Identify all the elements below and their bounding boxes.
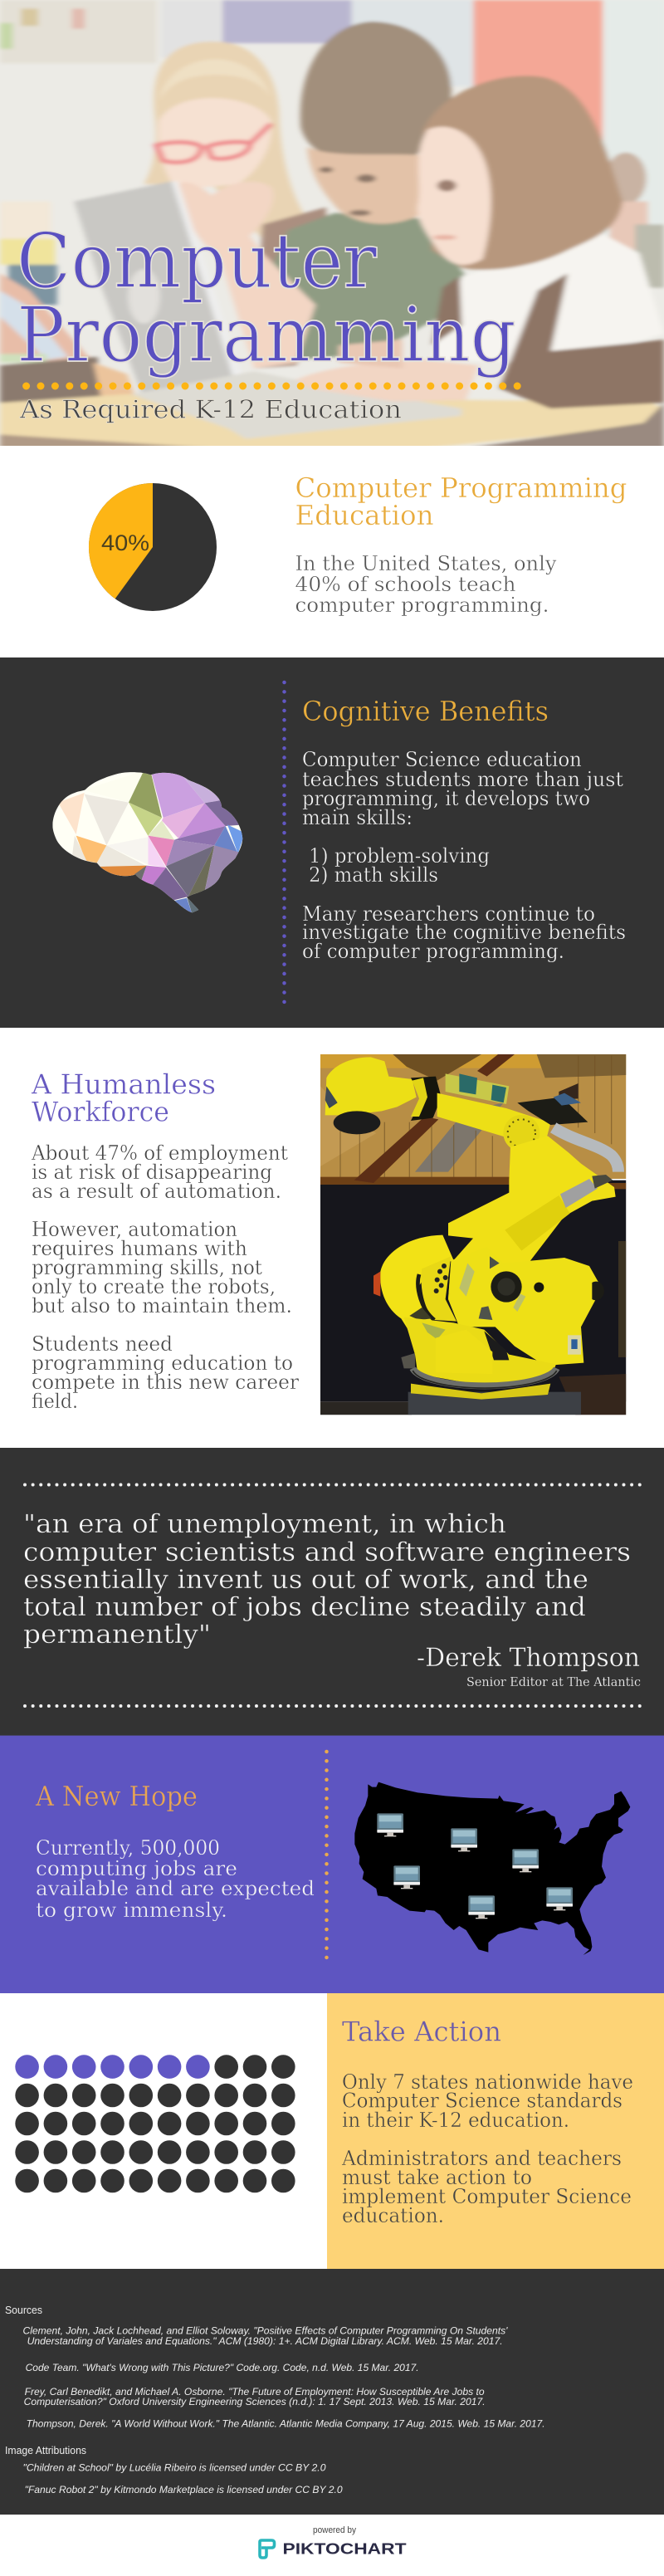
- laptop screen: [73, 181, 234, 393]
- body text: Administrators and teachers: [341, 2147, 622, 2170]
- heading: Workforce: [32, 1096, 169, 1127]
- hands on keyboard: [296, 359, 479, 402]
- lower body: [404, 1317, 556, 1386]
- right girl features: [432, 180, 456, 240]
- panel: a humanless workforce: [32, 1054, 626, 1415]
- boy eye: [320, 167, 376, 216]
- boy hair: [300, 22, 452, 161]
- piktochart wordmark: PIKTOCHART: [282, 2540, 407, 2557]
- body text: programming education to: [32, 1352, 293, 1375]
- computer 6: [546, 1887, 573, 1910]
- panel: take action: [327, 1993, 664, 2269]
- heading: Cognitive Benefits: [302, 695, 549, 727]
- attribution: [417, 1643, 641, 1689]
- boy shirt: [262, 213, 466, 359]
- body text: available and are expected: [36, 1877, 315, 1900]
- background child: [606, 153, 664, 288]
- right girl shirt: [432, 233, 664, 363]
- body text: as a result of automation.: [32, 1180, 281, 1203]
- body text: About 47% of employment: [31, 1141, 288, 1165]
- photo: yellow industrial robot: [320, 1054, 626, 1415]
- body text: Computer Science standards: [342, 2089, 622, 2112]
- icon: piktochart logo: [260, 2540, 274, 2558]
- body text: [36, 1836, 315, 1922]
- body text: investigate the cognitive benefits: [302, 921, 626, 944]
- body text: However, automation: [32, 1218, 237, 1241]
- right wall: [603, 0, 664, 259]
- panel: cognitive benefits: [0, 657, 664, 1028]
- body text: Students need: [32, 1332, 173, 1356]
- body text: in their K-12 education.: [342, 2109, 569, 2132]
- source citations: Clement, John, Jack Lochhead, and Elliot Soloway. "Positive Effects of Computer Programming On Students': [23, 2325, 508, 2337]
- boy face: [307, 147, 432, 224]
- table: [0, 394, 664, 448]
- bench: [559, 1374, 626, 1415]
- heading: Education: [295, 499, 433, 531]
- body text: of computer programming.: [302, 940, 564, 963]
- pie chart 40%: [89, 483, 217, 611]
- heading: Take Action: [342, 2016, 501, 2047]
- image attributions: "Fanuc Robot 2" by Kitmondo Marketplace is licensed under CC BY 2.0: [25, 2484, 343, 2495]
- body text: 1) problem-solving: [309, 844, 490, 868]
- ring front arc: [413, 1368, 557, 1386]
- body text: education.: [342, 2204, 444, 2227]
- laptop base: [131, 371, 461, 439]
- diagonal beam: [477, 1054, 515, 1077]
- remaining dots: [15, 2055, 295, 2192]
- hero subtitle: As Required K-12 Education: [19, 395, 402, 425]
- body text: computing jobs are: [36, 1857, 237, 1880]
- right girl hair back: [423, 76, 622, 270]
- source citations: Thompson, Derek. "A World Without Work." The Atlantic. Atlantic Media Company, 17 Aug. 2015. Web. 15 Mar. 2017.: [27, 2417, 545, 2429]
- body text: to grow immensly.: [36, 1899, 227, 1922]
- icon: US map with computers: [354, 1782, 630, 1955]
- sources heading: Sources: [5, 2304, 42, 2316]
- right girl dress: [500, 273, 664, 408]
- computer 2: [451, 1828, 477, 1851]
- bottom dotted rule: [25, 1704, 640, 1708]
- body text: main skills:: [302, 806, 413, 829]
- main pivot wheel: [491, 1271, 522, 1303]
- body text: [341, 2070, 633, 2227]
- computer 4: [393, 1865, 420, 1889]
- source citations: Computerisation?" Oxford University Engineering Sciences (n.d.): 1. 17 Sept. 2013. Web. 15 Mar. 2017.: [24, 2396, 486, 2407]
- box: [436, 1330, 492, 1374]
- body text: [31, 1141, 300, 1413]
- forearm and upper link: [448, 1136, 616, 1324]
- hero section: [0, 0, 664, 448]
- hero title: [17, 217, 516, 379]
- computer 1: [377, 1813, 403, 1836]
- body text: In the United States, only: [295, 552, 557, 575]
- heading: Computer Programming: [295, 472, 627, 504]
- computer 3: [512, 1849, 539, 1872]
- highlighted dots: 7 states: [15, 2055, 210, 2079]
- poster wall top left: [0, 0, 220, 63]
- heading: A New Hope: [35, 1780, 198, 1812]
- girl left shoulders: [254, 208, 326, 369]
- side opening: [459, 1264, 475, 1297]
- hero dotted divider: [27, 382, 518, 390]
- footer: powered by piktochart: [0, 2515, 664, 2576]
- wrist joint: [503, 1115, 540, 1151]
- body text: implement Computer Science: [342, 2185, 632, 2208]
- heading: [295, 472, 627, 531]
- upper arm: [437, 1093, 550, 1144]
- body text: field.: [32, 1390, 78, 1413]
- top dotted rule: [25, 1483, 640, 1486]
- body text: is at risk of disappearing: [32, 1161, 272, 1184]
- horizontal beam: [320, 1177, 514, 1185]
- quotation: permanently": [23, 1620, 211, 1650]
- attribution: -Derek Thompson: [417, 1643, 640, 1673]
- yellow base: [411, 1384, 550, 1400]
- source citations: [23, 2325, 545, 2429]
- body text: teaches students more than just: [302, 768, 623, 791]
- source citations: Frey, Carl Benedikt, and Michael A. Osborne. "The Future of Employment: How Susceptible Are Jobs to: [25, 2386, 485, 2398]
- body text: programming skills, not: [32, 1256, 262, 1279]
- hero photo: children at laptop: [0, 0, 664, 448]
- body text: must take action to: [342, 2166, 532, 2189]
- image attributions heading: Image Attributions: [5, 2444, 86, 2456]
- panel: quote: [0, 1448, 664, 1735]
- hero title: Programming: [17, 291, 516, 379]
- body text: Many researchers continue to: [302, 902, 595, 926]
- main base body: [448, 1247, 602, 1366]
- quotation: "an era of unemployment, in which: [23, 1509, 506, 1539]
- end effector head: [325, 1057, 417, 1115]
- heading: [31, 1068, 216, 1127]
- quotation: total number of jobs decline steadily and: [23, 1592, 586, 1622]
- body text: Only 7 states nationwide have: [342, 2070, 633, 2094]
- red panel: [473, 0, 603, 161]
- image attributions: [23, 2462, 343, 2495]
- quotation: computer scientists and software engineers: [23, 1537, 631, 1567]
- icon: low-poly brain: [50, 770, 247, 916]
- bolt cluster: [434, 1264, 448, 1293]
- computer 5: [468, 1895, 495, 1919]
- left items: [0, 202, 135, 408]
- panel: computer programming education: [0, 446, 664, 657]
- body text: 40% of schools teach: [295, 573, 516, 596]
- dark curtain: [320, 1180, 626, 1401]
- panel: a new hope: [0, 1735, 664, 1993]
- body text: [295, 552, 557, 617]
- big shoulder drum: [380, 1235, 454, 1343]
- body text: 2) math skills: [309, 863, 438, 887]
- wrist ring: [411, 1077, 442, 1121]
- panel: sources: [0, 2269, 664, 2515]
- right girl face: [417, 127, 491, 265]
- pie chart 40%: 40%: [101, 530, 149, 555]
- vertical dotted divider: [282, 682, 286, 1002]
- panel: dot pictogram 7 of 50 states: [0, 1993, 327, 2269]
- attribution: Senior Editor at The Atlantic: [466, 1674, 641, 1689]
- body text: but also to maintain them.: [32, 1294, 292, 1317]
- body text: programming, it develops two: [302, 787, 590, 810]
- body text: computer programming.: [295, 594, 549, 617]
- girl left hair: [144, 42, 314, 239]
- left cable: [401, 1353, 415, 1368]
- source citations: Understanding of Variales and Equations." ACM (1980): 1+. ACM Digital Library. ACM. Web. 15 Mar. 2017.: [27, 2335, 503, 2347]
- heading: A Humanless: [31, 1068, 216, 1101]
- powered by text: powered by: [313, 2525, 356, 2535]
- body text: [302, 748, 626, 963]
- quotation: essentially invent us out of work, and the: [23, 1565, 588, 1595]
- pedestal: [408, 1392, 581, 1415]
- body text: requires humans with: [32, 1237, 247, 1260]
- girl glasses: [157, 124, 271, 163]
- source citations: Code Team. "What's Wrong with This Picture?" Code.org. Code, n.d. Web. 15 Mar. 2017.: [26, 2362, 419, 2373]
- vertical dotted divider: [325, 1752, 329, 1967]
- body text: only to create the robots,: [32, 1275, 276, 1298]
- body text: Computer Science education: [302, 748, 582, 771]
- body text: Currently, 500,000: [36, 1836, 220, 1860]
- hero title: Computer: [17, 217, 377, 306]
- label plate: [568, 1335, 581, 1355]
- wall between: [351, 0, 473, 86]
- exhaust hose: [554, 1127, 618, 1172]
- wall: [320, 1068, 626, 1179]
- purple panel: [222, 0, 354, 43]
- girl left part of hair: [163, 60, 266, 92]
- map silhouette: [354, 1782, 630, 1955]
- girl left face: [159, 98, 271, 190]
- body text: compete in this new career: [32, 1371, 300, 1394]
- girl left arm and hands: [178, 182, 315, 369]
- quotation: [23, 1509, 631, 1650]
- image attributions: "Children at School" by Lucélia Ribeiro is licensed under CC BY 2.0: [23, 2462, 326, 2474]
